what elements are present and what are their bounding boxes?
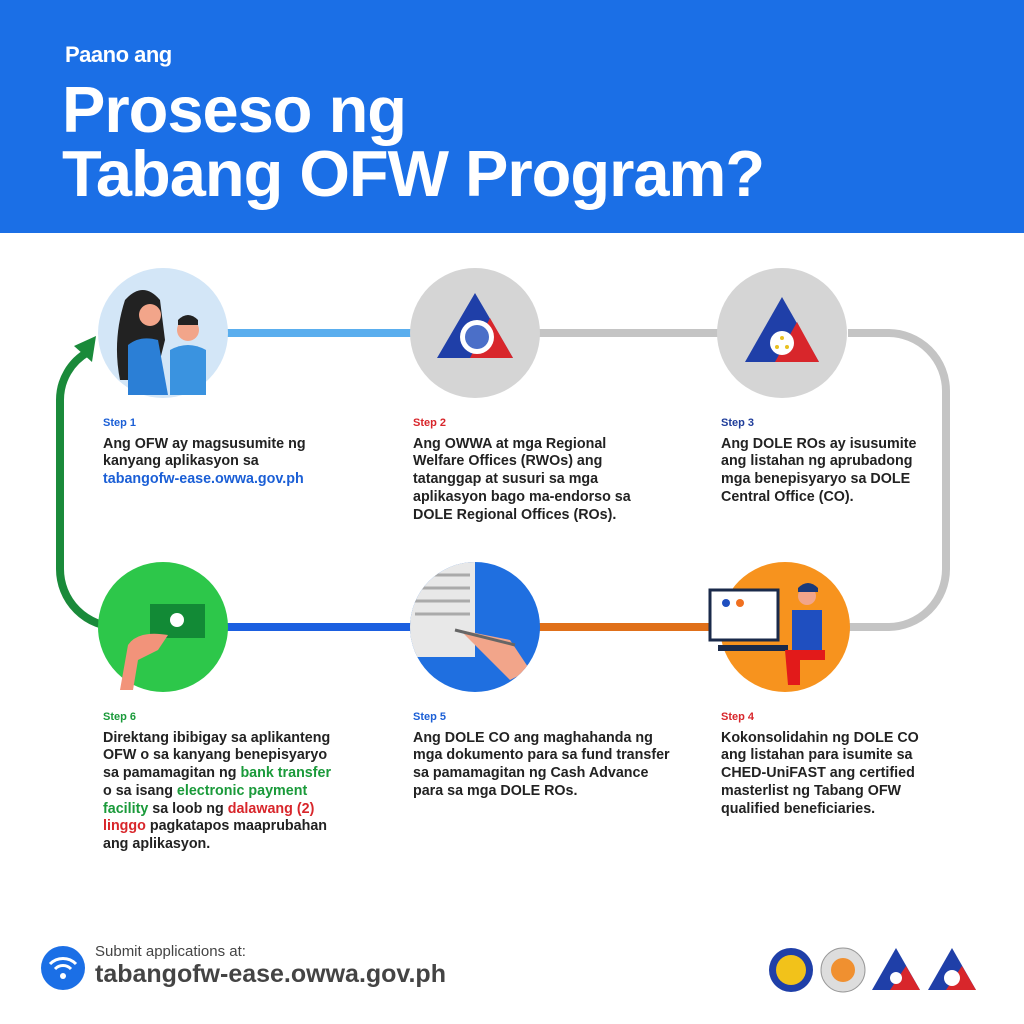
step 2 text <box>413 417 631 523</box>
step 2 text: Step 2 <box>413 417 446 429</box>
step 5 text: sa pamamagitan ng Cash Advance <box>413 765 648 781</box>
step 2 text: DOLE Regional Offices (ROs). <box>413 507 616 523</box>
step 3 text: Central Office (CO). <box>721 489 854 505</box>
step 6 text: facility sa loob ng dalawang (2) <box>103 801 314 817</box>
footer label: Submit applications at: <box>95 943 246 960</box>
step 2 text: aplikasyon bago ma-endorso sa <box>413 489 631 505</box>
icon: step6 money <box>98 562 228 692</box>
step 6 text: linggo pagkatapos maaprubahan <box>103 818 327 834</box>
step 6 text: Direktang ibibigay sa aplikanteng <box>103 730 330 746</box>
step 5 text: Step 5 <box>413 711 446 723</box>
step 6 text: Step 6 <box>103 711 136 723</box>
step 3 text <box>721 417 916 505</box>
icon: step1 people <box>98 268 228 398</box>
icon: footer wifi <box>41 946 85 990</box>
step 5 text: para sa mga DOLE ROs. <box>413 783 577 799</box>
step 6 text: ang aplikasyon. <box>103 836 210 852</box>
step 5 text: mga dokumento para sa fund transfer <box>413 747 670 763</box>
step 6 text <box>103 711 331 852</box>
step 4 text: CHED-UniFAST ang certified <box>721 765 915 781</box>
step 1 text: Ang OFW ay magsusumite ng <box>103 436 306 452</box>
step 4 text: Step 4 <box>721 711 754 723</box>
icon: step2 OWWA logo <box>410 268 540 398</box>
title <box>62 73 764 210</box>
process diagram <box>41 268 976 992</box>
step 1 text: kanyang aplikasyon sa <box>103 453 259 469</box>
step 3 text: Step 3 <box>721 417 754 429</box>
step 4 text <box>721 711 919 817</box>
step 6 text: sa pamamagitan ng bank transfer <box>103 765 331 781</box>
step 1 text: Step 1 <box>103 417 136 429</box>
step 3 text: mga benepisyaryo sa DOLE <box>721 471 910 487</box>
subtitle: Paano ang <box>65 42 172 67</box>
header banner <box>0 0 1024 233</box>
title: Tabang OFW Program? <box>62 137 764 210</box>
step 4 text: qualified beneficiaries. <box>721 801 875 817</box>
step 2 text: Welfare Offices (RWOs) ang <box>413 453 602 469</box>
step 4 text: masterlist ng Tabang OFW <box>721 783 901 799</box>
footer url: tabangofw-ease.owwa.gov.ph <box>95 960 446 988</box>
step 1 text: tabangofw-ease.owwa.gov.ph <box>103 471 304 487</box>
step 6 text: OFW o sa kanyang benepisyaryo <box>103 747 327 763</box>
step 6 text: o sa isang electronic payment <box>103 783 307 799</box>
step 3 text: ang listahan ng aprubadong <box>721 453 912 469</box>
step 4 text: Kokonsolidahin ng DOLE CO <box>721 730 919 746</box>
step 3 text: Ang DOLE ROs ay isusumite <box>721 436 916 452</box>
step 5 text: Ang DOLE CO ang maghahanda ng <box>413 730 653 746</box>
step 2 text: tatanggap at susuri sa mga <box>413 471 598 487</box>
connector lines <box>60 333 946 627</box>
step 5 text <box>413 711 670 799</box>
icon: step3 DOLE logo <box>717 268 847 398</box>
icon: step4 computer worker <box>710 562 850 692</box>
icon: step5 document <box>410 562 540 692</box>
step 1 text <box>103 417 306 487</box>
logos <box>769 948 976 992</box>
step 2 text: Ang OWWA at mga Regional <box>413 436 606 452</box>
title: Proseso ng <box>62 73 406 146</box>
step 4 text: ang listahan para isumite sa <box>721 747 912 763</box>
